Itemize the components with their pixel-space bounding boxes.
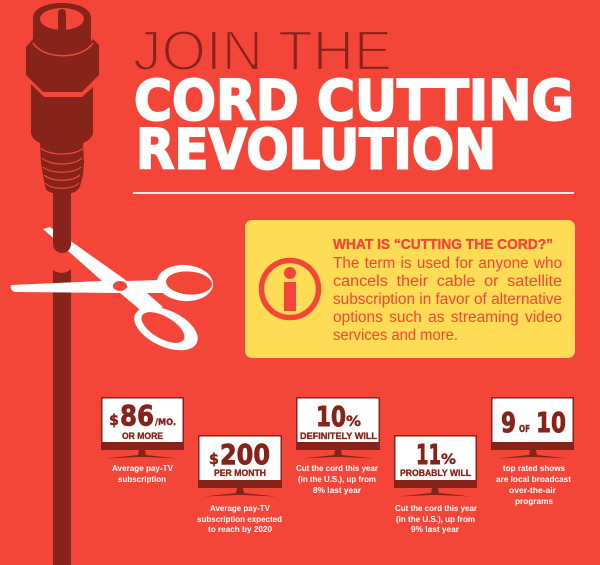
title	[133, 19, 574, 181]
title rule	[133, 192, 574, 194]
title: CORD CUTTING	[134, 68, 574, 132]
stat: 9 of 10	[491, 397, 574, 506]
stat: $200 per month: Average pay-TV	[210, 503, 270, 513]
stat: 10% definitely will: Cut the cord this year	[296, 463, 379, 473]
stat: 11% probably will: 11	[416, 438, 441, 471]
stat: 9 of 10: 10	[536, 406, 566, 439]
stat: $86 per month: /MO.	[155, 418, 176, 428]
stat: 9 of 10: over-the-air	[509, 485, 557, 495]
callout heading: WHAT IS “CUTTING THE CORD?”	[333, 237, 553, 253]
stat: $200 per month: subscription expected	[197, 514, 282, 524]
icon: info	[262, 260, 318, 318]
stat: $86 per month: subscription	[118, 474, 166, 484]
stat: 10% definitely will: (in the U.S.), up from	[298, 474, 376, 484]
stat: $200 per month: PER MONTH	[214, 468, 266, 479]
title: JOIN THE	[133, 19, 392, 83]
icon: coaxial cable connector	[26, 3, 99, 194]
stat: $200 per month: 200	[220, 438, 270, 471]
stat: $86 per month: $	[109, 411, 119, 429]
callout body: services and more.	[333, 327, 458, 344]
stat: 10% definitely will: 10	[316, 400, 346, 433]
stat: 9 of 10: top rated shows	[503, 463, 565, 473]
callout body: options such as streaming video	[333, 309, 562, 326]
stat: $200 per month: $	[209, 450, 219, 468]
stat: $86 per month	[101, 397, 184, 484]
title: REVOLUTION	[136, 117, 496, 181]
stat: $86 per month: OR MORE	[122, 431, 164, 442]
stat: 11% probably will	[394, 435, 478, 534]
stat: 9 of 10: OF	[519, 424, 530, 435]
stat: $200 per month	[197, 435, 282, 534]
stat: 10% definitely will: DEFINITELY WILL	[300, 431, 377, 442]
icon: scissors	[11, 227, 214, 359]
stat: 10% definitely will: 8% last year	[313, 485, 362, 495]
stat: $86 per month: Average pay-TV	[112, 463, 173, 473]
upper cord	[53, 190, 71, 253]
callout body: cancels their cable or satellite	[333, 273, 562, 290]
stat: $200 per month: to reach by 2020	[208, 524, 272, 534]
callout body: subscription in favor of alternative	[333, 291, 562, 308]
stat: 9 of 10: 9	[501, 406, 516, 439]
stat: 9 of 10: are local broadcast	[496, 474, 571, 484]
stat: 11% probably will: 9% last year	[411, 524, 460, 534]
stat: 9 of 10: programs	[515, 496, 553, 506]
lower cord	[53, 269, 71, 565]
stat: 10% definitely will: %	[346, 414, 361, 430]
panel: what is cutting the cord	[245, 220, 575, 358]
stat: 11% probably will: Cut the cord this year	[395, 503, 478, 513]
stat: 10% definitely will	[296, 397, 380, 495]
callout body: The term is used for anyone who	[333, 255, 562, 272]
stat: 11% probably will: (in the U.S.), up from	[396, 514, 475, 524]
stat: 11% probably will: %	[441, 452, 456, 468]
stat: $86 per month: 86	[120, 399, 154, 432]
stat: 11% probably will: PROBABLY WILL	[400, 468, 471, 479]
callout body	[333, 255, 562, 344]
